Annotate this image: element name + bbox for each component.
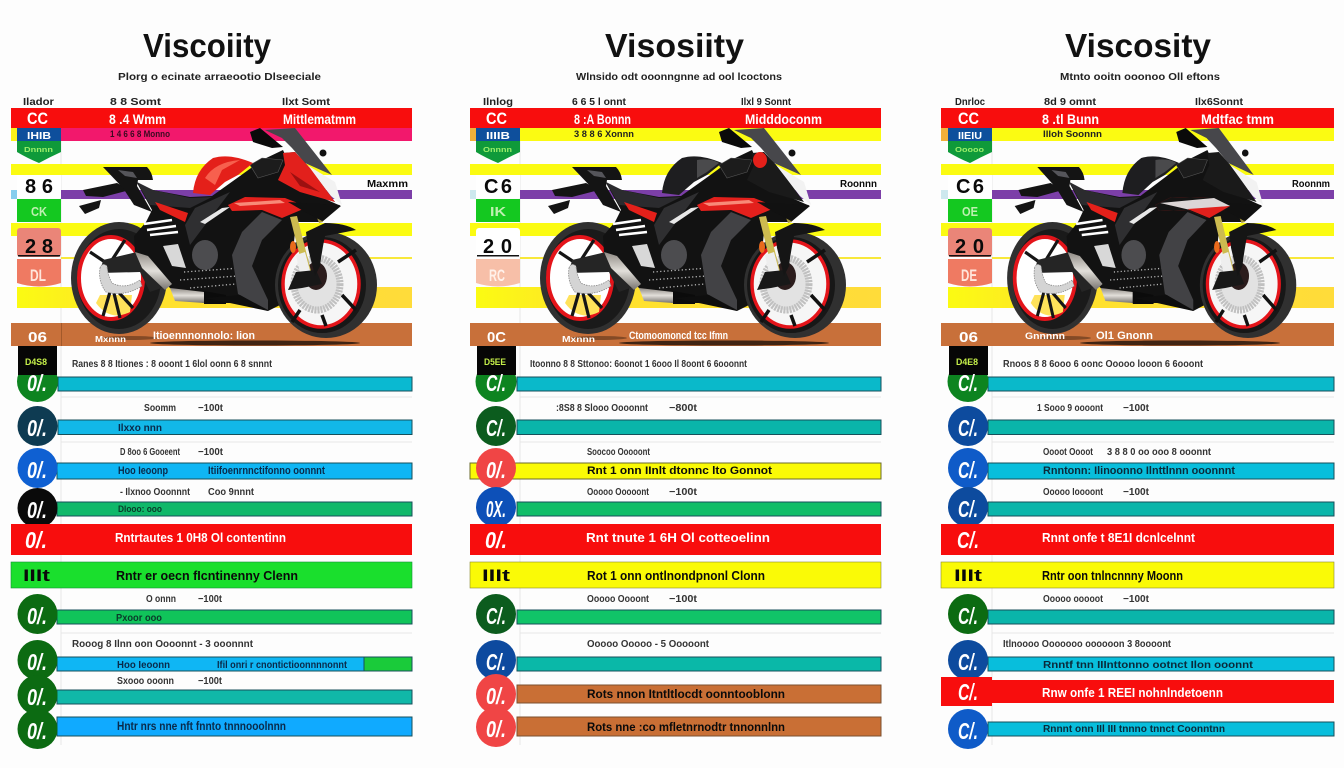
row 7: 0/.	[27, 684, 47, 710]
row 5: Ooooo Oooont	[587, 594, 650, 605]
row 4: - Ilxnoo Ooonnnt	[120, 487, 191, 498]
row 5	[476, 594, 881, 634]
stripe rows behind motorcycle	[470, 128, 881, 308]
shield salmon	[948, 259, 992, 286]
subtitle: Mtnto ooitn ooonoo Oll eftons	[1060, 72, 1220, 83]
box green	[948, 199, 992, 222]
row 5: −100t	[198, 594, 223, 605]
orange bar: Ol1 Gnonn	[1096, 330, 1153, 342]
row 1: Rnoos 8 8 6ooo 6 oonc Ooooo looon 6 6ooont	[1003, 359, 1204, 370]
box c 6: C 6	[484, 176, 512, 198]
box c 6: C 6	[956, 176, 984, 198]
row 3: 3 8 8 0 oo ooo 8 ooonnt	[1107, 447, 1212, 458]
column headers: Ilnlog	[483, 97, 513, 108]
header bar red	[470, 108, 881, 128]
row 2: 1 Sooo 9 oooont	[1037, 403, 1104, 414]
row 1: 0/.	[27, 370, 47, 396]
row 1: C/.	[958, 370, 978, 396]
row 4: Ooooo Ioooont	[1043, 487, 1104, 498]
row 7: Sxooo ooonn	[117, 676, 174, 687]
column headers: 8 8 Somt	[110, 97, 162, 108]
row 5: 0/.	[27, 603, 47, 629]
stripe rows behind motorcycle	[11, 128, 412, 308]
header bar red: Midddoconm	[745, 111, 822, 127]
panel: center viscosity chart	[470, 27, 881, 747]
column headers: Ilxt Somt	[282, 97, 331, 108]
header bar red	[941, 108, 1334, 128]
title: Viscosity	[1065, 27, 1212, 64]
box salmon 2 0	[948, 228, 992, 258]
row 2: C/.	[958, 415, 978, 441]
orange bar: 0C	[487, 329, 506, 346]
row 4: 0X.	[486, 496, 506, 522]
subtitle: Wlnsido odt ooonngnne ad ool lcoctons	[576, 72, 782, 83]
column headers	[483, 97, 792, 108]
row 6: Rnntf tnn IIInttonno ootnct Ilon ooonnt	[1043, 660, 1254, 671]
yellow row: Rntr oon tnlncnnny Moonn	[1042, 568, 1183, 583]
row 2: −100t	[198, 403, 224, 414]
row 8: Rots nne :co mfletnrnodtr tnnonnlnn	[587, 722, 785, 734]
row 4: Dlooo: ooo	[118, 504, 162, 515]
row 5	[18, 594, 412, 634]
header bar red: 8 .4 Wmm	[109, 111, 166, 127]
row 4: −100t	[669, 487, 698, 498]
box green: CK	[31, 204, 48, 219]
yellow row	[470, 562, 881, 588]
header bar red: 8 .tl Bunn	[1042, 111, 1099, 127]
column headers: Ilxl 9 Sonnt	[741, 97, 792, 108]
orange bar: Ctomoomoncd tcc Ifmn	[629, 330, 728, 342]
row 2	[948, 403, 1334, 446]
shield salmon: DE	[961, 266, 977, 285]
row 2: Soomm	[144, 403, 176, 414]
row 4	[18, 487, 412, 528]
row 3	[470, 447, 881, 488]
row 7	[476, 674, 881, 714]
row 6: Itlnoooo Ooooooo oooooon 3 8oooont	[1003, 639, 1172, 650]
row 6	[18, 639, 412, 680]
row 7 red: Rnw onfe 1 REEI nohnlndetoenn	[1042, 686, 1223, 700]
subtitle: Plorg o ecinate arraeootio Dlseeciale	[118, 72, 321, 83]
row 2: C/.	[486, 415, 506, 441]
shield badge	[476, 128, 520, 163]
row 8: 0/.	[486, 716, 506, 742]
row 5: O onnn	[146, 594, 176, 605]
box c 6	[948, 175, 992, 198]
row 4: C/.	[958, 496, 978, 522]
green row: IIIt	[23, 566, 50, 585]
row 8: Rnnnt onn IIl III tnnno tnnct Coonntnn	[1043, 723, 1225, 735]
row 6: C/.	[486, 649, 506, 675]
shield badge	[17, 128, 61, 163]
row 2: −800t	[669, 403, 698, 414]
green row	[11, 562, 412, 588]
motorcycle	[1007, 128, 1296, 338]
stripe rows behind motorcycle: Maxmm	[367, 179, 408, 190]
row 1: C/.	[486, 370, 506, 396]
box c 6	[476, 175, 520, 198]
row 5: Ooooo ooooot	[1043, 594, 1104, 605]
orange bar	[470, 323, 881, 346]
title: Viscoiity	[143, 27, 272, 64]
motorcycle	[540, 128, 846, 338]
title: Visosiity	[605, 27, 745, 64]
row 8	[476, 707, 881, 747]
row 3: Rnntonn: Ilinoonno Ilnttlnnn ooonnnt	[1043, 465, 1235, 477]
row 3: Hoo Ieoonp	[118, 465, 168, 477]
header bar red: 8 :A Bonnn	[574, 111, 631, 127]
box salmon 2 0: 2 0	[955, 236, 984, 258]
yellow row: IIIt	[954, 566, 982, 585]
row 3: Itiifoenrnnctifonno oonnnt	[208, 465, 325, 477]
header bar red: CC	[486, 109, 507, 128]
row 1: Itoonno 8 8 Sttonoo: 6oonot 1 6ooo Il 8oont 6 6ooonnt	[530, 359, 748, 370]
row 1	[17, 346, 412, 402]
shield peach	[476, 259, 520, 286]
orange bar: Itioennnonnolo: lion	[153, 330, 255, 342]
row 4	[476, 487, 881, 527]
row 3: Rnt 1 onn IInlt dtonnc lto Gonnot	[587, 465, 772, 477]
row 5: −100t	[669, 594, 698, 605]
row 4: Coo 9nnnt	[208, 487, 255, 498]
red row	[11, 524, 412, 555]
row 6: Hoo Ieoonn	[117, 660, 170, 671]
row 7: Rots nnon Itntltlocdt oonntooblonn	[587, 689, 785, 701]
row 3: D 8oo 6 Gooeent	[120, 447, 181, 458]
red row: Rntrtautes 1 0H8 Ol contentinn	[115, 530, 286, 545]
column headers: Ilador	[23, 97, 54, 108]
shield salmon: DL	[30, 266, 46, 285]
row 5	[948, 594, 1334, 634]
column headers: Ilx6Sonnt	[1195, 97, 1244, 108]
row 7: 0/.	[486, 683, 506, 709]
panel: left viscosity chart	[11, 27, 412, 749]
red row	[941, 524, 1334, 555]
red row: C/.	[957, 527, 979, 553]
row 7	[18, 675, 412, 715]
yellow row: Rot 1 onn ontlnondpnonl Clonn	[587, 568, 765, 583]
red row: 0/.	[25, 527, 47, 553]
row 2: Ilxxo nnn	[118, 423, 162, 434]
red row: 0/.	[485, 527, 507, 553]
row 2	[18, 403, 412, 446]
shield badge: IIEIU	[958, 131, 982, 142]
row 8	[948, 709, 1334, 749]
row 3	[18, 447, 412, 488]
row 5: Pxoor ooo	[116, 613, 162, 624]
row 4: −100t	[1123, 487, 1150, 498]
red row: Rnt tnute 1 6H Ol cotteoelinn	[586, 530, 770, 545]
column headers: Dnrloc	[955, 97, 985, 108]
shield badge: Dnnnn	[24, 147, 53, 154]
row 5: C/.	[486, 603, 506, 629]
row 1: Ranes 8 8 Itiones : 8 ooont 1 6lol oonn 6 8 snnnt	[72, 359, 273, 370]
row 4	[948, 487, 1334, 527]
box green: OE	[962, 204, 978, 219]
box 8 6	[17, 175, 61, 198]
header bar red: CC	[27, 109, 48, 128]
shield badge: Onnnn	[483, 147, 512, 154]
row 4: Ooooo Ooooont	[587, 487, 650, 498]
orange bar: Mxnnn	[95, 335, 126, 344]
row 6: C/.	[958, 649, 978, 675]
box green	[476, 199, 520, 222]
box white 2 0	[476, 228, 520, 258]
stripe rows behind motorcycle: Roonnn	[840, 179, 877, 190]
header bar red: Mittlematmm	[283, 111, 356, 127]
shield peach: RC	[489, 266, 505, 285]
yellow row	[941, 562, 1334, 588]
row 7 red	[941, 677, 1334, 706]
row 8: 0/.	[27, 718, 47, 744]
row 1: D4S8	[25, 357, 47, 367]
panel: right viscosity chart	[941, 27, 1334, 749]
row 8	[18, 709, 412, 749]
row 5: C/.	[958, 603, 978, 629]
row 6: Ooooo Ooooo - 5 Ooooont	[587, 639, 710, 650]
row 8: Hntr nrs nne nft fnnto tnnnooolnnn	[117, 721, 286, 733]
orange bar: Gnnnnn	[1025, 331, 1065, 341]
row 1: D5EE	[484, 357, 506, 367]
stripe rows behind motorcycle: Roonnm	[1292, 179, 1330, 190]
red row	[470, 524, 881, 555]
red row: Rnnt onfe t 8E1I dcnlcelnnt	[1042, 530, 1196, 545]
box white 2 0: 2 0	[483, 236, 512, 258]
stripe rows behind motorcycle: 1 4 6 6 8 Monno	[110, 129, 170, 139]
column headers	[955, 97, 1244, 108]
column headers: 6 6 5 l onnt	[572, 97, 627, 108]
row 3: 0/.	[27, 457, 47, 483]
row 1	[948, 346, 1334, 402]
row 2: 0/.	[27, 415, 47, 441]
shield badge: IHIB	[27, 131, 51, 142]
yellow row: IIIt	[482, 566, 510, 585]
header bar red: CC	[958, 109, 979, 128]
row 2: −100t	[1123, 403, 1150, 414]
shield badge	[948, 128, 992, 163]
row 5: −100t	[1123, 594, 1150, 605]
row 3: Soocoo Ooooont	[587, 447, 651, 458]
stripe rows behind motorcycle	[941, 128, 1334, 308]
row 3: C/.	[958, 457, 978, 483]
row 2	[476, 403, 881, 446]
row 7: −100t	[198, 676, 223, 687]
green row: Rntr er oecn fIcntinenny Clenn	[116, 568, 298, 583]
orange bar: Mxnnn	[562, 335, 595, 344]
orange bar: 06	[28, 329, 47, 346]
row 1: D4E8	[956, 357, 978, 367]
shield badge: IIIIB	[486, 131, 510, 142]
box green: IK	[490, 204, 507, 219]
row 3: −100t	[198, 447, 224, 458]
shield salmon	[17, 259, 61, 286]
stripe rows behind motorcycle: 3 8 8 6 Xonnn	[574, 129, 634, 139]
box salmon 2 8: 2 8	[25, 236, 53, 258]
column headers: 8d 9 omnt	[1044, 97, 1097, 108]
header bar red: Mdtfac tmm	[1201, 111, 1274, 127]
box salmon 2 8	[17, 228, 61, 258]
column headers	[23, 97, 331, 108]
row 2: :8S8 8 Slooo Oooonnt	[556, 403, 649, 414]
motorcycle	[71, 128, 377, 338]
row 6: Rooog 8 Ilnn oon Oooonnt - 3 ooonnnt	[72, 639, 254, 650]
row 3: Oooot Oooot	[1043, 447, 1094, 458]
row 1	[476, 346, 881, 402]
orange bar	[941, 323, 1334, 346]
row 6	[476, 639, 881, 680]
orange bar	[11, 323, 412, 346]
orange bar: 06	[959, 329, 978, 346]
row 3	[948, 447, 1334, 488]
stripe rows behind motorcycle: Illoh Soonnn	[1043, 129, 1102, 139]
shield badge: Ooooo	[955, 147, 984, 154]
box 8 6: 8 6	[25, 176, 53, 198]
row 4: 0/.	[27, 497, 47, 523]
row 6	[948, 639, 1334, 680]
row 6: 0/.	[27, 649, 47, 675]
header bar red	[11, 108, 412, 128]
box green	[17, 199, 61, 222]
row 8: C/.	[958, 718, 978, 744]
row 3: 0/.	[486, 457, 506, 483]
row 7 red: C/.	[958, 679, 978, 705]
row 6: Ifil onri r cnontictioonnnnonnt	[217, 660, 348, 671]
